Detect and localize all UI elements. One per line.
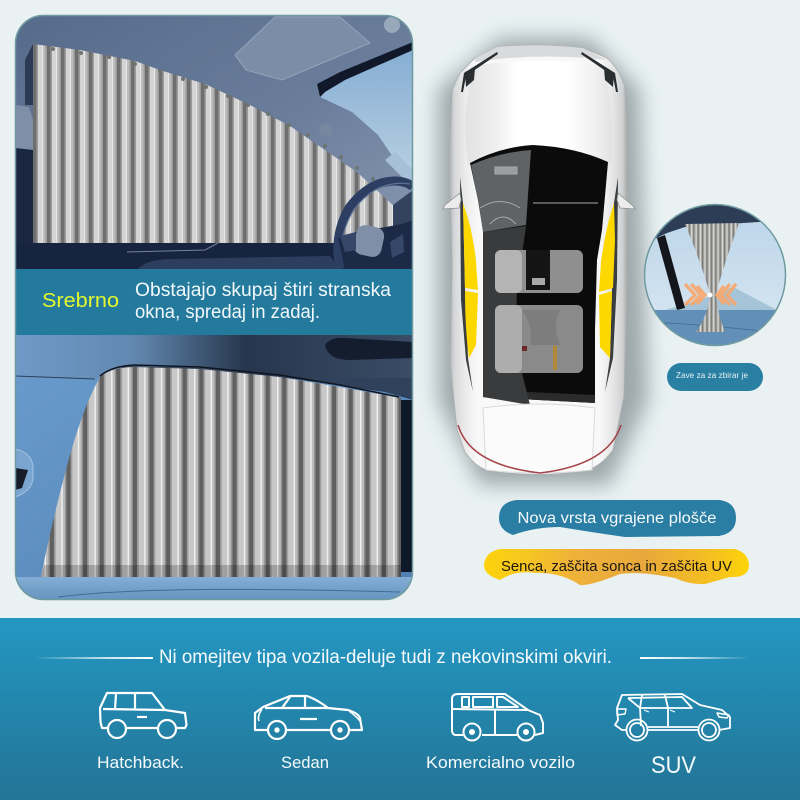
headlights	[461, 52, 618, 92]
hood	[465, 60, 612, 165]
panel: curtain photos	[15, 15, 413, 600]
curtain rail	[100, 365, 399, 397]
gathered curtain	[685, 223, 739, 332]
label: commercial vehicle: Komercialno vozilo	[426, 754, 575, 772]
icon: hatchback	[100, 693, 186, 738]
text: banner description: okna, spredaj in zadaj.	[135, 302, 320, 323]
curtain hooks	[51, 47, 375, 181]
text: banner description	[135, 280, 391, 323]
curtain: rear window	[41, 367, 401, 577]
steering wheel	[338, 181, 413, 269]
pill label: tie-back: Zave za za zbirar je	[676, 371, 749, 380]
label: colour name: Srebrno	[42, 290, 119, 312]
door shades: yellow	[463, 203, 615, 358]
pill label: built-in plate	[499, 500, 736, 537]
label: SUV: SUV	[651, 752, 696, 779]
windshield reflection	[471, 150, 531, 232]
banner: colour description	[15, 269, 413, 335]
icon: sedan	[255, 696, 362, 739]
photo: rear side window interior	[15, 335, 413, 600]
glass roof	[470, 145, 608, 403]
icon: SUV	[615, 694, 730, 740]
curtain: front window	[33, 44, 395, 243]
pill label: sun protection	[484, 549, 749, 585]
pillar	[657, 235, 685, 310]
heading rule left	[35, 657, 153, 659]
arrows: orange gather direction	[685, 284, 736, 305]
pill label: tie-back	[667, 363, 763, 391]
mirrors	[443, 193, 635, 209]
pill label: sun protection: Senca, zaščita sonca in zaščita UV	[501, 558, 732, 575]
panel: vehicle types	[0, 618, 800, 800]
front bumper	[475, 45, 607, 62]
inset: curtain tie-back circle	[640, 200, 790, 350]
heading rule right	[640, 657, 750, 659]
roof	[656, 205, 760, 238]
label: hatchback: Hatchback.	[97, 754, 184, 772]
pill label: built-in plate: Nova vrsta vgrajene plošče	[518, 510, 716, 527]
text: banner description: Obstajajo skupaj štiri stranska	[135, 280, 391, 301]
door	[654, 310, 776, 345]
rear seats	[495, 305, 583, 373]
tail light	[458, 425, 621, 473]
illustration: car top view	[443, 45, 635, 474]
photo: front side window interior	[15, 15, 413, 269]
label: sedan: Sedan	[281, 754, 329, 772]
trunk	[483, 404, 595, 473]
mountain	[665, 287, 777, 310]
dashboard details	[480, 167, 598, 224]
icon: commercial van	[452, 694, 543, 740]
car shadow	[438, 38, 648, 485]
car body	[449, 45, 628, 474]
window frame dark strips	[460, 177, 618, 392]
glass rear edge	[483, 390, 595, 403]
front seats	[495, 250, 583, 293]
heading: Ni omejitev tipa vozila-deluje tudi z nekovinskimi okviri.	[159, 647, 612, 668]
